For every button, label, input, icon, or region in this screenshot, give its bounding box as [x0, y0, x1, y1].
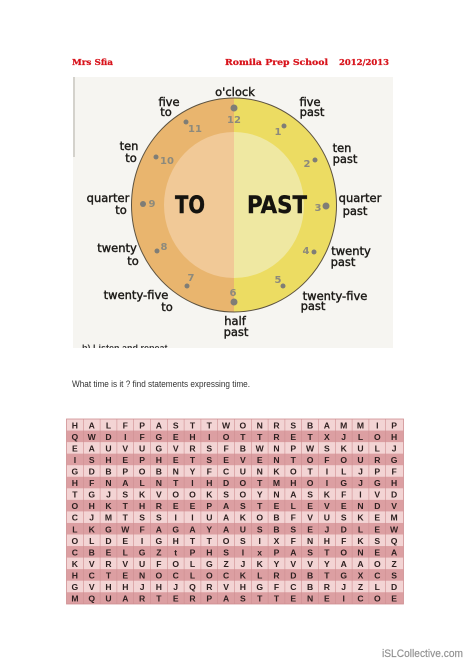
label: o'clock: o'clock: [215, 85, 255, 99]
instruction text: What time is it ? find statements expressing time.: [72, 379, 250, 389]
label: twenty past: twenty: [331, 244, 371, 258]
word search grid: HFNALNTIHDOTMHOIGJGH: [72, 478, 397, 488]
label: twenty to: to: [127, 254, 139, 268]
label: quarter to: [87, 194, 130, 214]
clock numbers and dots: 5: [275, 275, 282, 286]
label: twenty past: [331, 246, 371, 269]
label: twenty-five past: [301, 289, 367, 313]
label: twenty-five to: twenty-five: [104, 288, 168, 302]
label: quarter past: quarter: [339, 191, 382, 205]
word search grid: CBELGZtPHSIxPASTONEA: [72, 547, 397, 557]
word search grid: LKGWFAGAYAUSBSEJDLEW: [72, 524, 399, 534]
panel: clock illustration: [73, 77, 393, 353]
label: five past: [299, 95, 325, 119]
label: half past: half: [224, 314, 247, 328]
label: twenty-five past: past: [301, 299, 326, 313]
label: twenty past: past: [331, 255, 356, 269]
word search grid: EAUVUGVRSFBWNPWSKULJ: [72, 443, 397, 453]
header: school year: 2012/2013: [339, 58, 389, 68]
label: twenty-five to: to: [161, 300, 173, 314]
label: five past: past: [300, 105, 325, 119]
label: half past: [224, 314, 249, 339]
label: ten past: past: [333, 152, 358, 166]
label: five past: five: [299, 95, 321, 109]
clock numbers and dots: 9: [149, 199, 156, 210]
clock numbers and dots: 1: [275, 127, 282, 138]
word search grid: HALFPASTTWONRSBAMMIP: [72, 420, 397, 430]
word search grid: [66, 419, 404, 604]
clock numbers and dots: 6: [230, 288, 237, 299]
word search grid: HCTENOCLOCKLRDBTGXCS: [72, 570, 397, 580]
watermark: iSLCollective.com: [382, 648, 463, 660]
label: ten past: ten: [333, 141, 351, 155]
word search grid: ISHEPHETSEVENTOFOURG: [74, 455, 398, 465]
label: twenty to: twenty: [97, 241, 137, 255]
clock numbers and dots: 8: [161, 242, 168, 253]
header: school name: Romila Prep School: [225, 58, 329, 68]
label: five to: [158, 96, 180, 116]
label: twenty to: [97, 244, 138, 266]
clock numbers and dots: 12: [227, 115, 241, 126]
clock numbers and dots: 4: [303, 246, 310, 257]
label: ten to: [120, 142, 138, 162]
word search grid: MQUARTERPASTTENEICOE: [71, 594, 397, 604]
clock numbers and dots: 7: [188, 273, 195, 284]
label: quarter past: [339, 191, 382, 218]
label: half past: past: [224, 325, 249, 339]
label: PAST: PAST: [247, 191, 308, 219]
word search grid: OLDEIGHTTOSIXFNHFKSQ: [72, 536, 398, 546]
clock numbers and dots: 2: [304, 159, 311, 170]
word search grid: GVHHJHJQRVHGFCBRJZLD: [72, 582, 397, 592]
word search grid: GDBPOBNYFCUNKOTILJPF: [72, 466, 397, 476]
clock numbers and dots: 10: [160, 156, 174, 167]
clock numbers and dots: 11: [188, 124, 202, 135]
label: quarter past: past: [343, 204, 368, 218]
clock numbers and dots: 3: [315, 203, 322, 214]
label: ten to: ten: [120, 139, 138, 153]
label: twenty-five to: [104, 290, 172, 312]
label: ten to: to: [125, 151, 137, 165]
word search grid: CJMTSSIIUAKOBFVUSKEM: [72, 513, 398, 523]
clipped caption: b) Listen and repeat: [82, 343, 168, 353]
word search grid: QWDIFGEHIOTTRETXJLOH: [72, 432, 397, 442]
label: TO: TO: [175, 191, 205, 219]
label: quarter to: to: [115, 203, 127, 217]
clock numbers and dots: [140, 104, 330, 306]
clock face: [132, 98, 336, 312]
header: teacher name: Mrs Sfia: [72, 58, 114, 68]
word search grid: OHKTHREEPASTELEVENDV: [72, 501, 397, 511]
label: five to: to: [160, 105, 172, 119]
label: five to: five: [158, 95, 180, 109]
label: quarter to: quarter: [87, 191, 130, 205]
label: twenty-five past: twenty-five: [303, 289, 367, 303]
label: ten past: [332, 144, 358, 166]
word search grid: TGJSKVOOKSOYNASKFIVD: [72, 490, 397, 500]
word search grid: KVRVUFOLGZJKYVVYAAOZ: [72, 559, 397, 569]
